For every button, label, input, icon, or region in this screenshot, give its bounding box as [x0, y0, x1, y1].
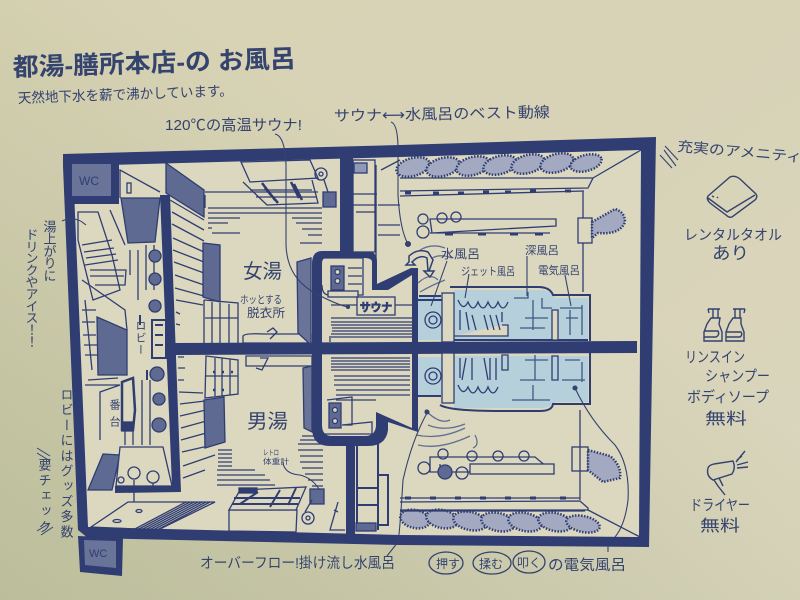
- upper cold bath: [418, 296, 442, 300]
- label: reception: 番台: [108, 399, 120, 428]
- leader: sauna: [275, 134, 347, 307]
- sauna stove lower: [329, 403, 341, 428]
- massage beds top: [394, 150, 604, 180]
- leader: cold label: [431, 261, 447, 306]
- note: lobby goods: 要チェック: [36, 458, 52, 533]
- lower center wall: [346, 440, 355, 538]
- leader: electric bath: [575, 388, 628, 552]
- women's bench: [241, 160, 318, 205]
- subtitle: 天然地下水を薪で沸かしています。: [18, 83, 233, 106]
- cold bath: [229, 487, 345, 532]
- room label: women: 女湯: [243, 260, 282, 283]
- wash area: [400, 150, 641, 537]
- corridor bottom: [357, 425, 388, 530]
- caption: overflow: オーバーフロー!掛け流し水風呂: [200, 555, 395, 572]
- caption: electric massage: [429, 551, 626, 574]
- leader: drink: [62, 219, 86, 225]
- note: drink: [24, 220, 56, 348]
- note: lobby goods: ロビーにはグッズ多数: [58, 388, 74, 538]
- women's floor hatch: [208, 208, 322, 243]
- upper sauna benches: [322, 258, 363, 295]
- leader: overflow: [387, 413, 427, 556]
- title: 都湯-膳所本店-の お風呂: [12, 45, 296, 82]
- lobby bench counter: [78, 212, 120, 300]
- leader: deep label: [526, 256, 528, 296]
- leader: electric label: [565, 275, 571, 306]
- men's right floor hatch: [298, 436, 323, 486]
- sauna label: サウナ: [360, 301, 392, 314]
- wc bottom: WC: [89, 548, 107, 560]
- lobby interior: [78, 170, 215, 530]
- grey panel women: [297, 258, 311, 345]
- text: rental towel: レンタルタオル: [684, 227, 782, 244]
- floor plan: [24, 122, 800, 576]
- entrance plants: [116, 447, 172, 486]
- lobby vending: [152, 320, 166, 358]
- label: deep bath: 深風呂: [525, 244, 559, 257]
- steam top: [418, 246, 452, 292]
- jet bubbles upper: [458, 300, 508, 330]
- text: dryer free: ドライヤー: [690, 497, 750, 514]
- leader: jet label: [465, 274, 469, 298]
- note: lobby goods: [36, 388, 74, 538]
- wc top: [66, 158, 119, 204]
- lobby floor stripes: [125, 245, 154, 445]
- massage beds bottom: [398, 507, 601, 535]
- lobby dark stair top: [121, 198, 160, 243]
- corridor top: [353, 160, 375, 252]
- text: rental towel: [684, 227, 782, 263]
- top wall fixture: [578, 218, 592, 243]
- sauna stove upper: [331, 266, 344, 290]
- lower jet: [458, 355, 558, 393]
- steam bottom: [416, 410, 477, 448]
- pool: lower water: [418, 356, 588, 408]
- caption: electric massage: 揉む: [479, 556, 503, 571]
- pool dividers upper: [454, 310, 558, 340]
- icon: bottles: [704, 309, 745, 341]
- door mat: [91, 502, 215, 530]
- changing room hatching: [166, 160, 345, 532]
- wc bottom: [78, 536, 123, 576]
- text: dryer free: 無料: [700, 517, 740, 535]
- label: electric bath: 電気風呂: [538, 263, 580, 277]
- sauna walls: [312, 251, 418, 446]
- text: dryer free: [690, 497, 750, 535]
- wc top: WC: [79, 174, 99, 188]
- women's slipper bench: [243, 328, 311, 343]
- text: rinse shampoo soap: 無料: [705, 410, 747, 428]
- note: drink: ドリンクやアイス！！: [24, 228, 38, 348]
- label: jet bath: ジェット風呂: [461, 266, 515, 278]
- lobby wall: [115, 195, 181, 493]
- lower deep lines: [512, 355, 585, 400]
- sauna label: [357, 297, 395, 315]
- room label: men: 男湯: [247, 410, 288, 433]
- left slanted hatch upper: [170, 200, 204, 325]
- leader lines: [62, 122, 628, 556]
- leader: best route: [391, 122, 408, 244]
- men's left floor hatch: [217, 450, 275, 485]
- men's grey locker: [204, 397, 225, 448]
- panel: amenities: [660, 138, 800, 535]
- room label: retro scale: レトロ: [263, 448, 279, 457]
- pool: upper water: [418, 290, 588, 340]
- bottom wall fixture: [572, 447, 588, 471]
- lobby dark stair bottom: [97, 317, 127, 375]
- lobby stools: [149, 250, 166, 432]
- callout: best route: サウナ⟷水風呂のベスト動線: [334, 104, 550, 125]
- label: cold bath: 水風呂: [441, 247, 480, 261]
- text: rinse shampoo soap: リンスイン: [685, 349, 745, 366]
- arrow sauna to cold bath: [406, 251, 434, 277]
- caption: electric massage: の電気風呂: [548, 557, 626, 574]
- room label: retro scale: [263, 448, 290, 466]
- icon: towel: [707, 176, 757, 217]
- caption: electric massage: 叩く: [517, 556, 541, 570]
- text: rinse shampoo soap: シャンプー: [705, 368, 770, 385]
- text: rinse shampoo soap: [685, 349, 770, 428]
- women's grey locker: [203, 243, 220, 302]
- bottom wash shelf: [430, 457, 553, 472]
- upper pool outline: [450, 287, 590, 340]
- left slanted hatch lower: [178, 357, 217, 478]
- scale: [283, 463, 319, 489]
- upper center wall: [340, 152, 353, 254]
- amenity heading: [660, 138, 800, 168]
- callout: 120 degree sauna: 120℃の高温サウナ!: [165, 117, 302, 134]
- center partition wall: [175, 341, 637, 355]
- men's slipper bench: [246, 356, 312, 370]
- text: rinse shampoo soap: ボディソープ: [687, 388, 769, 406]
- room label: changing: 脱衣所: [247, 305, 285, 320]
- text: rental towel: あり: [712, 244, 749, 263]
- caption: electric massage: 押す: [436, 557, 460, 571]
- outer walls: [63, 137, 656, 547]
- women grey slant panel: [166, 163, 204, 217]
- top shelf: [400, 150, 641, 292]
- room label: retro scale: 体重計: [263, 456, 290, 466]
- women's locker shelves: [204, 300, 238, 343]
- floor fill: [66, 145, 645, 540]
- sauna interior: [322, 160, 412, 531]
- note: drink: 湯上がりに: [42, 220, 56, 282]
- lower sauna benches: [331, 358, 410, 400]
- amenity heading: 充実のアメニティ: [677, 138, 800, 165]
- top wash shelf: [430, 219, 556, 233]
- lower pool outline: [440, 353, 590, 411]
- label: lobby: ロビー: [134, 320, 146, 356]
- grey panel men: [303, 366, 312, 432]
- entrance dark mat: [88, 454, 120, 490]
- men's locker shelves: [205, 356, 238, 398]
- reception counter: [122, 378, 135, 430]
- room label: relax changing: ホッとする: [240, 294, 282, 306]
- lower cold bath: [442, 353, 454, 403]
- bottom shelf: [400, 410, 640, 537]
- deep pool lines upper: [514, 292, 582, 335]
- icon: dryer: [708, 451, 748, 495]
